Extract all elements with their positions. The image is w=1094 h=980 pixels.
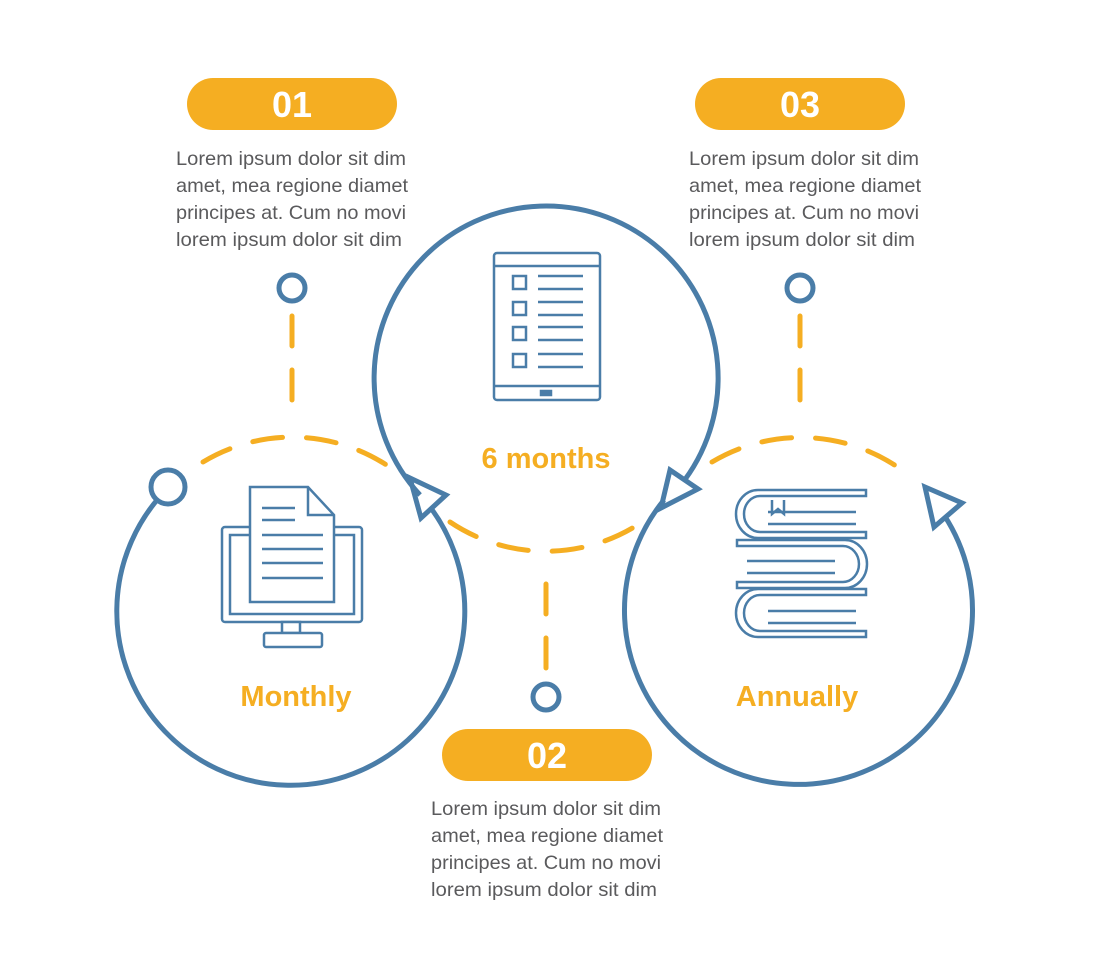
text 01: Lorem ipsum dolor sit dim (176, 148, 406, 170)
pill 03: 03 (780, 84, 820, 125)
text 03: principes at. Cum no movi (689, 202, 919, 224)
pill 02: 02 (527, 735, 567, 776)
marker: monthly start (151, 470, 185, 504)
icon: tablet checklist (494, 253, 600, 400)
text 03: amet, mea regione diamet (689, 175, 922, 197)
text 03: Lorem ipsum dolor sit dim (689, 148, 919, 170)
text 02: lorem ipsum dolor sit dim (431, 879, 657, 901)
pill 01 (187, 78, 397, 130)
dashed connectors (203, 316, 896, 672)
label 6 months: 6 months (482, 443, 610, 475)
icon: computer document (222, 487, 362, 647)
text 02 (431, 798, 664, 901)
text 01: amet, mea regione diamet (176, 175, 409, 197)
label monthly: Monthly (240, 681, 352, 713)
circle: annually (624, 487, 972, 784)
arrow: annually (925, 487, 962, 527)
arrow: monthly (410, 478, 446, 518)
icon: books (736, 490, 867, 637)
text 02: principes at. Cum no movi (431, 852, 661, 874)
text 01: principes at. Cum no movi (176, 202, 406, 224)
pill 03 (695, 78, 905, 130)
text 01: lorem ipsum dolor sit dim (176, 229, 402, 251)
circle: 6 months (374, 206, 718, 508)
pill 02 (442, 729, 652, 781)
text 03 (689, 148, 922, 251)
label annually: Annually (736, 681, 858, 713)
markers (279, 275, 813, 710)
text 02: Lorem ipsum dolor sit dim (431, 798, 661, 820)
pill 01: 01 (272, 84, 312, 125)
circle: monthly (117, 470, 465, 785)
text 01 (176, 148, 409, 251)
arrow: 6 months (661, 470, 698, 508)
text 02: amet, mea regione diamet (431, 825, 664, 847)
text 03: lorem ipsum dolor sit dim (689, 229, 915, 251)
